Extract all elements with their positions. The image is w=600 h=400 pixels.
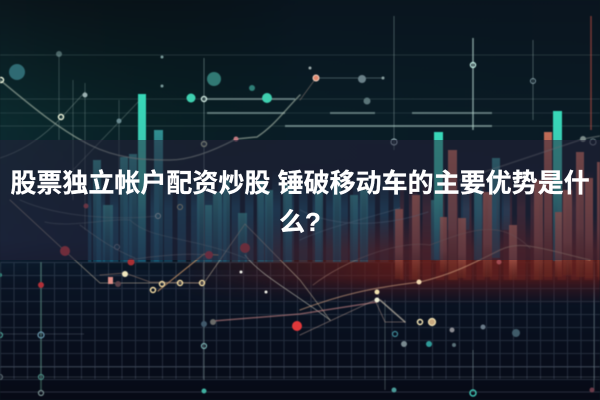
salmon bars xyxy=(395,132,600,280)
lower grid xyxy=(0,262,600,392)
title: 么? xyxy=(279,206,321,236)
bright teal bars xyxy=(138,94,562,262)
background bar stripes xyxy=(88,170,600,280)
horizontal guide lines xyxy=(0,55,600,126)
title: 股票独立帐户配资炒股 锤破移动车的主要优势是什 xyxy=(10,168,590,198)
teal bars xyxy=(93,130,500,262)
trend lines xyxy=(0,78,600,335)
red glow xyxy=(196,223,600,300)
title band xyxy=(0,140,600,260)
title xyxy=(10,168,590,236)
bar chart xyxy=(88,94,600,305)
